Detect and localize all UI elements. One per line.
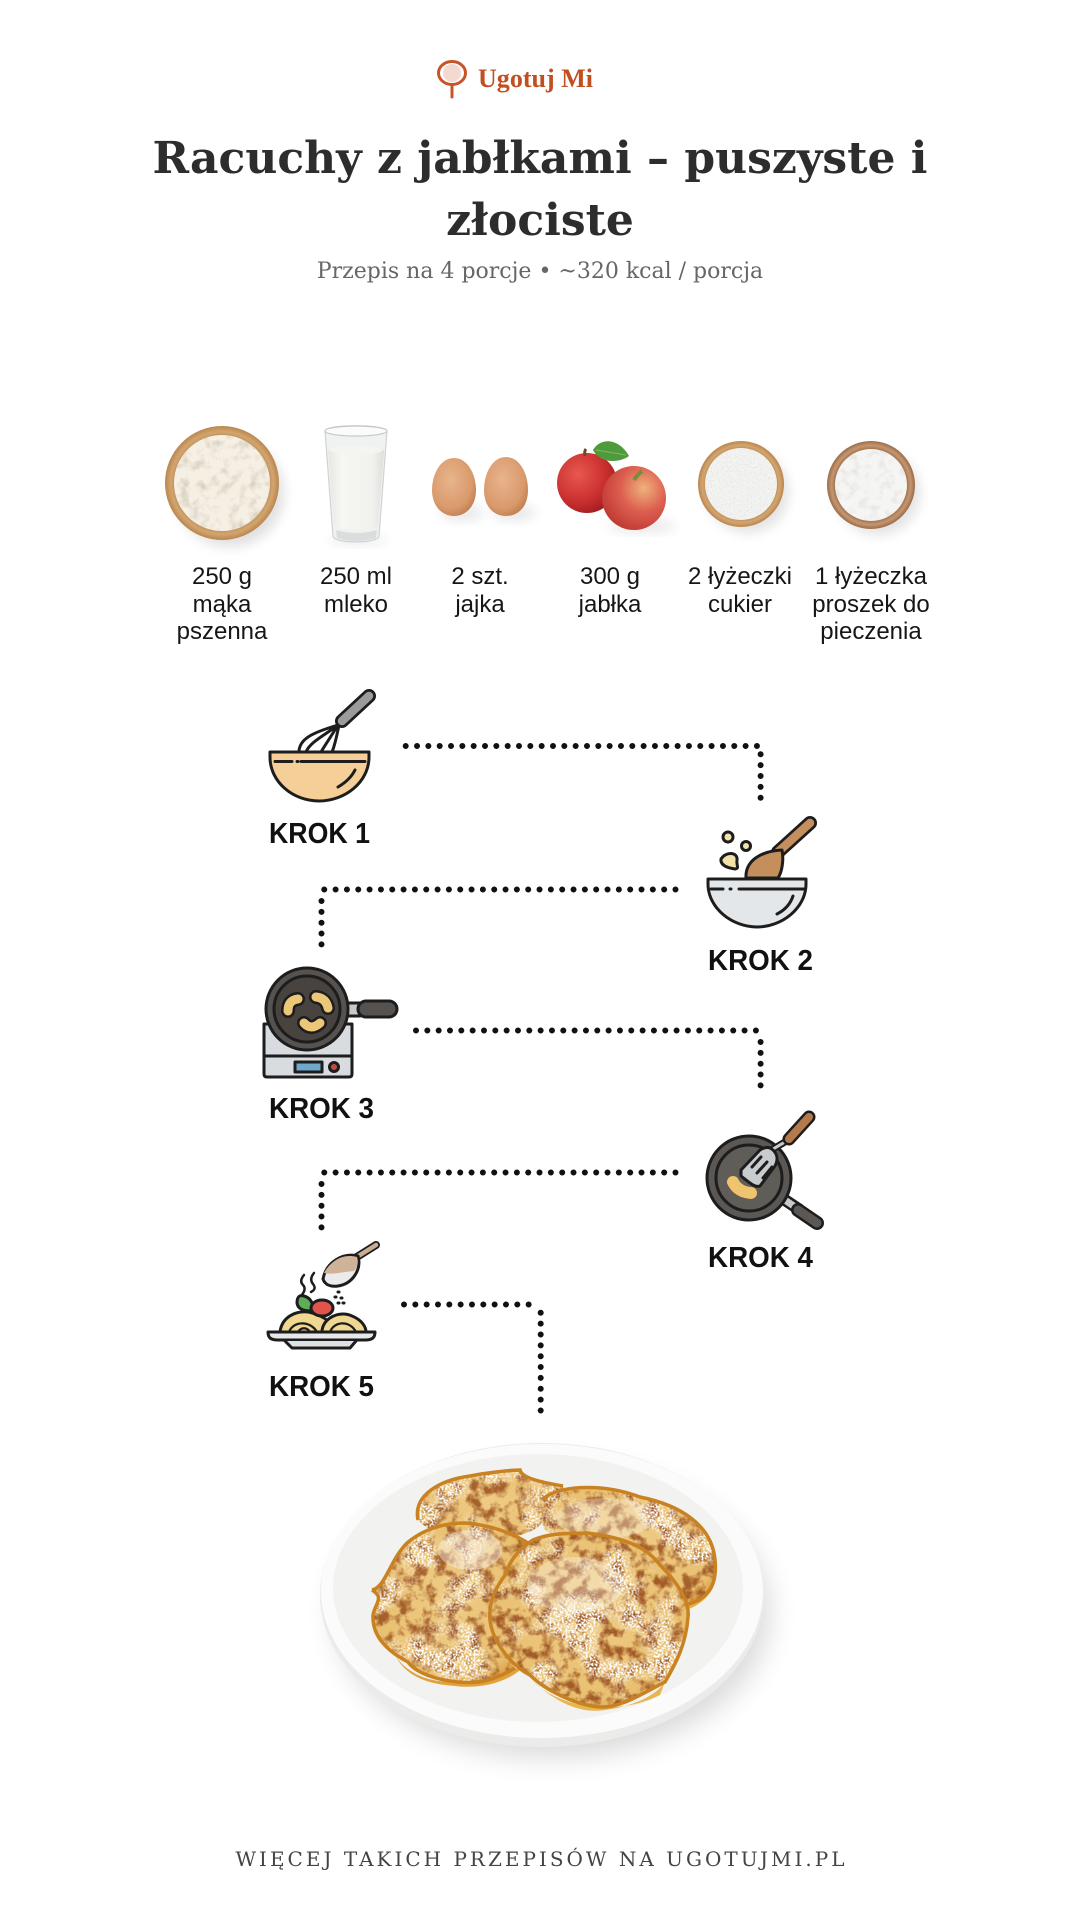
ingredients row [165,426,930,645]
label: proszek do [812,591,930,618]
icon: glass of milk [325,426,388,545]
label: 300 g [580,563,640,590]
icon: wooden spoon in bowl [708,823,810,927]
ingredient: eggs [432,457,536,618]
pancake: back right [539,1486,718,1609]
label: KROK 3 [269,1093,374,1125]
label: mleko [324,591,388,618]
label: 1 łyżeczka [815,563,928,590]
pancake: front right [485,1528,693,1712]
finished dish: plate of apple pancakes [320,1443,770,1758]
label: cukier [708,591,772,618]
label: 2 łyżeczki [688,563,792,590]
pancake: front left [365,1518,535,1688]
icon: whisk in bowl [270,696,369,801]
icon: two eggs [432,457,536,520]
step 3 [264,968,397,1125]
label: jajka [454,591,505,618]
label: mąka [193,591,252,618]
icon: logo spoon [438,62,466,97]
arrow: dotted connector 5 to finished dish [404,1304,541,1412]
step 1 [269,696,370,850]
step 2 [708,823,813,977]
icon: bowl of baking powder [827,441,920,535]
logo wordmark: Ugotuj Mi [478,64,593,93]
ingredient: sugar [688,441,792,618]
subtitle: Przepis na 4 porcje • ~320 kcal / porcja [317,259,763,284]
label: pszenna [177,618,268,645]
label: KROK 4 [708,1242,813,1274]
ingredient: milk [320,426,392,618]
ingredient: flour [165,426,284,645]
ingredient: baking powder [812,441,930,645]
icon: bowl of sugar [698,441,789,533]
pancake: back left [416,1468,564,1536]
label: 2 szt. [451,563,509,590]
icon: frying pan on induction stove [264,968,397,1077]
ingredient: apples [557,441,676,618]
arrow: dotted connector 4 to 5 [322,1172,676,1232]
title: Racuchy z jabłkami – puszyste i [152,133,928,184]
arrow: dotted connector 3 to 4 [416,1030,761,1090]
step 5 [268,1245,376,1403]
icon: two apples with leaf [557,441,676,532]
arrow: dotted connector 1 to 2 [406,746,761,799]
title: złociste [446,195,634,246]
footer call to action: WIĘCEJ TAKICH PRZEPISÓW NA UGOTUJMI.PL [236,1846,844,1871]
icon: pan with spatula [707,1117,817,1223]
label: jabłka [578,591,642,618]
icon: sprinkling sugar on plated food [268,1245,376,1348]
label: KROK 2 [708,945,813,977]
plate [320,1443,770,1758]
label: pieczenia [820,618,922,645]
icon: bowl of flour [165,426,284,547]
label: KROK 1 [269,818,370,850]
label: KROK 5 [269,1371,374,1403]
arrow: dotted connector 2 to 3 [322,890,676,948]
label: 250 ml [320,563,392,590]
logo: Ugotuj Mi [438,62,593,97]
label: 250 g [192,563,252,590]
step 4 [707,1117,817,1274]
